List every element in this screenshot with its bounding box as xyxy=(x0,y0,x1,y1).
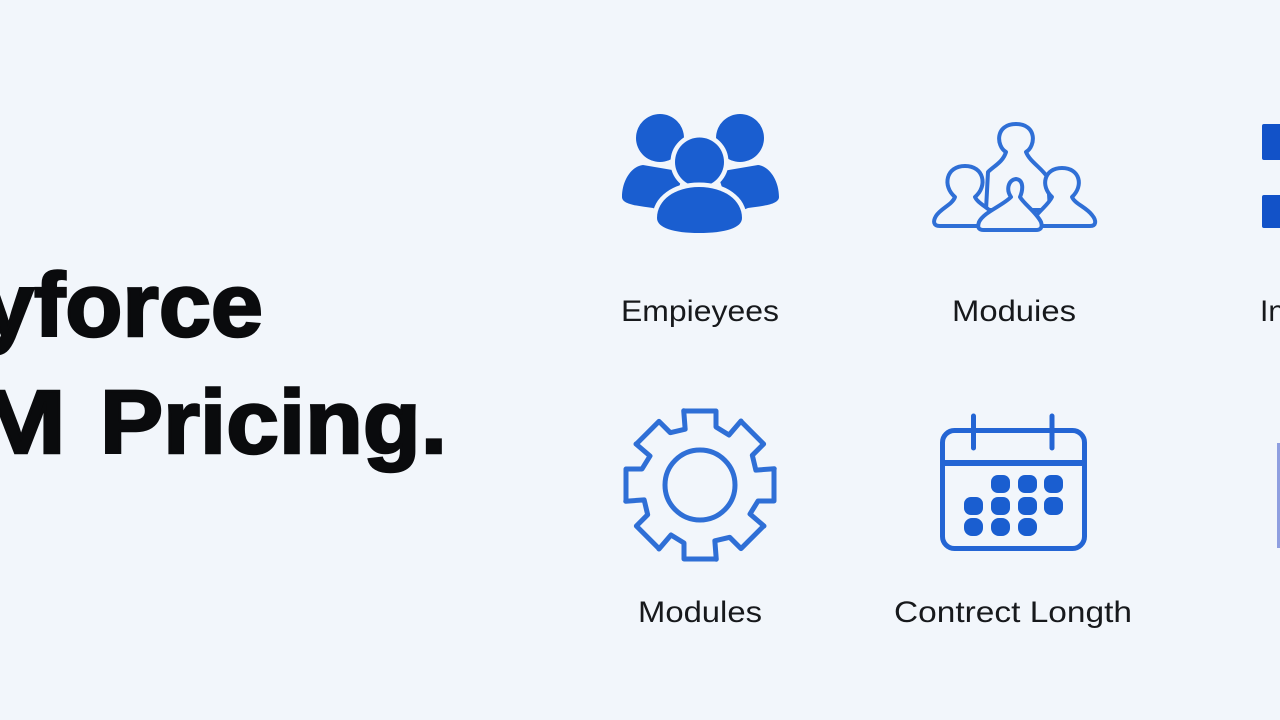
icon: modules people group, outlined xyxy=(934,124,1095,230)
label: Modules: Modules xyxy=(638,596,762,629)
icon: employees group, filled xyxy=(622,114,779,233)
label: Moduies: Moduies xyxy=(952,295,1076,328)
icon: partial cropped block at right edge xyxy=(1262,124,1280,228)
icon: calendar xyxy=(942,416,1085,548)
label: Empieyees: Empieyees xyxy=(621,295,779,328)
icon: partial cropped outline at right edge xyxy=(1277,443,1280,548)
label: Contrect Longth: Contrect Longth xyxy=(894,596,1132,629)
title xyxy=(0,256,447,473)
icon: gear xyxy=(619,404,781,566)
title: Pricing. xyxy=(100,373,447,473)
